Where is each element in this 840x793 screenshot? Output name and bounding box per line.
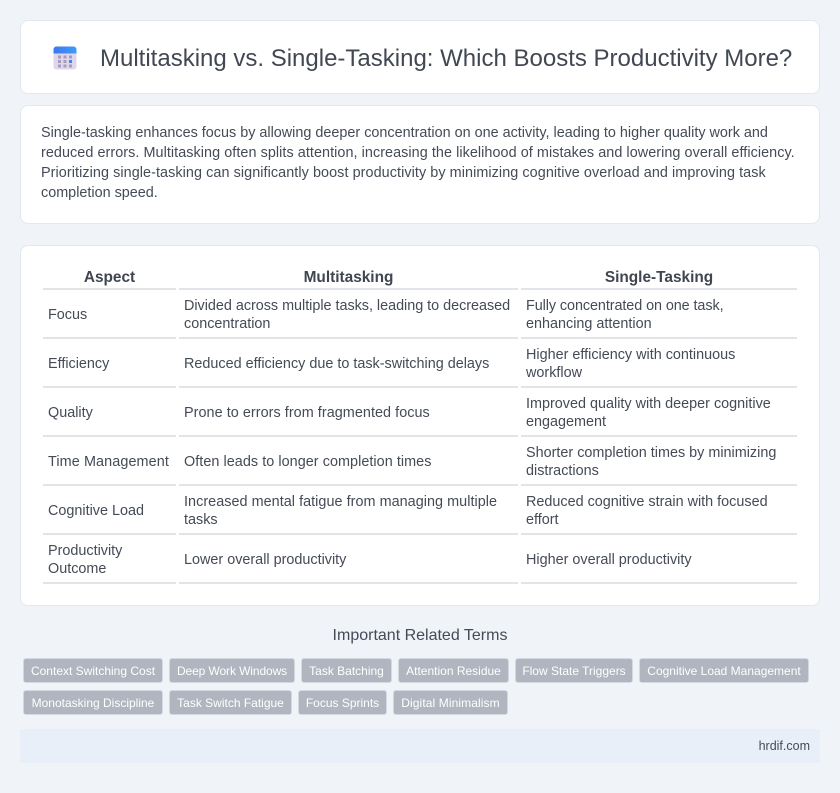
- comparison table: Improved quality with deeper cognitive: [526, 396, 771, 412]
- comparison table: [43, 269, 797, 584]
- related terms tags: Digital Minimalism: [401, 696, 500, 710]
- related terms tags: Task Switch Fatigue: [177, 696, 284, 710]
- related terms tags: Context Switching Cost: [31, 664, 155, 678]
- comparison table: distractions: [526, 463, 599, 479]
- intro text: completion speed.: [41, 185, 158, 201]
- comparison table: Prone to errors from fragmented focus: [184, 405, 430, 421]
- related terms tags: Monotasking Discipline: [32, 696, 154, 710]
- comparison table: Often leads to longer completion times: [184, 454, 431, 470]
- comparison table: workflow: [526, 365, 582, 381]
- comparison table: effort: [526, 512, 559, 528]
- comparison table: Reduced efficiency due to task-switching delays: [184, 356, 489, 372]
- intro text: Prioritizing single-tasking can significantly boost productivity by minimizing cognitive overload and improving task: [41, 165, 766, 181]
- comparison table: tasks: [184, 512, 218, 528]
- intro text: reduced errors. Multitasking often splits attention, increasing the likelihood of mistakes and lowering overall efficiency.: [41, 145, 795, 161]
- comparison table: Increased mental fatigue from managing multiple: [184, 494, 497, 510]
- comparison table: Fully concentrated on one task,: [526, 298, 724, 314]
- row: efficiency: Efficiency: [48, 356, 109, 372]
- related terms heading: Important Related Terms: [333, 627, 507, 644]
- row: focus: Focus: [48, 307, 87, 323]
- table card: [20, 245, 820, 606]
- intro card: [20, 105, 820, 224]
- row: time management: Time Management: [48, 454, 169, 470]
- intro text: Single-tasking enhances focus by allowing deeper concentration on one activity, leading to higher quality work and: [41, 125, 768, 141]
- comparison table: engagement: [526, 414, 606, 430]
- intro text: [41, 125, 795, 201]
- header card: [20, 20, 820, 94]
- header: aspect: Aspect: [84, 269, 135, 286]
- related terms tags: Attention Residue: [406, 664, 501, 678]
- comparison table: Outcome: [48, 561, 106, 577]
- comparison table: concentration: [184, 316, 270, 332]
- header: multitasking: Multitasking: [304, 269, 393, 286]
- comparison table: Shorter completion times by minimizing: [526, 445, 776, 461]
- icon: calendar: [54, 46, 76, 70]
- comparison table: Higher efficiency with continuous: [526, 347, 735, 363]
- row: productivity outcome: Productivity: [48, 543, 122, 559]
- related terms tags: Deep Work Windows: [177, 664, 287, 678]
- footer source: hrdif.com: [759, 739, 810, 753]
- related terms tags: Flow State Triggers: [522, 664, 626, 678]
- comparison table: Higher overall productivity: [526, 552, 692, 568]
- related terms tags: Task Batching: [309, 664, 384, 678]
- related terms tags: Cognitive Load Management: [647, 664, 801, 678]
- comparison table: Divided across multiple tasks, leading to decreased: [184, 298, 510, 314]
- comparison table: enhancing attention: [526, 316, 652, 332]
- related terms tags: Focus Sprints: [306, 696, 379, 710]
- row: quality: Quality: [48, 405, 93, 421]
- footer bar: [20, 729, 820, 763]
- title: Multitasking vs. Single-Tasking: Which Boosts Productivity More?: [100, 45, 792, 72]
- related terms tags: [23, 658, 809, 715]
- row: cognitive load: Cognitive Load: [48, 503, 144, 519]
- comparison table: Lower overall productivity: [184, 552, 346, 568]
- comparison table: Reduced cognitive strain with focused: [526, 494, 768, 510]
- header: single-tasking: Single-Tasking: [605, 269, 713, 286]
